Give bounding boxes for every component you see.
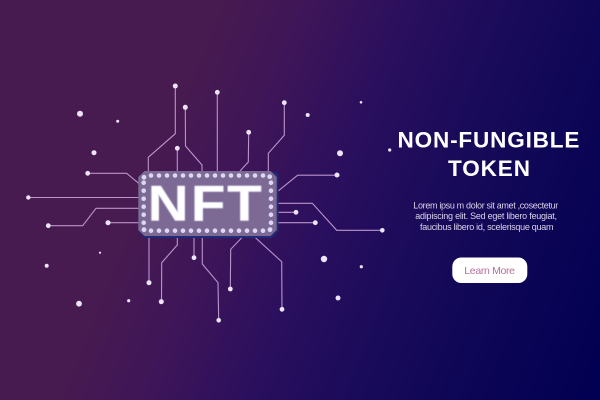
- NFT lettering: T: [227, 177, 262, 232]
- NFT lettering: N: [148, 177, 188, 232]
- learn more button: [452, 258, 527, 283]
- NFT chip: [138, 171, 278, 238]
- title: [398, 128, 579, 181]
- body text: adipiscing elit. Sed eget libero feugiat,: [415, 211, 557, 221]
- title: TOKEN: [448, 156, 530, 181]
- body text: Lorem ipsu m dolor sit amet ,cosectetur: [413, 200, 558, 210]
- chip border lights: [141, 173, 273, 233]
- learn more button: Learn More: [464, 265, 515, 277]
- body text: faucibus libero id, scelerisque quam: [420, 222, 554, 232]
- title: NON-FUNGIBLE: [398, 128, 579, 152]
- NFT lettering: [148, 177, 262, 232]
- circuit nodes and star dots: [26, 84, 391, 323]
- body text: [413, 200, 558, 232]
- NFT lettering: F: [191, 177, 225, 232]
- circuit traces: [28, 86, 382, 320]
